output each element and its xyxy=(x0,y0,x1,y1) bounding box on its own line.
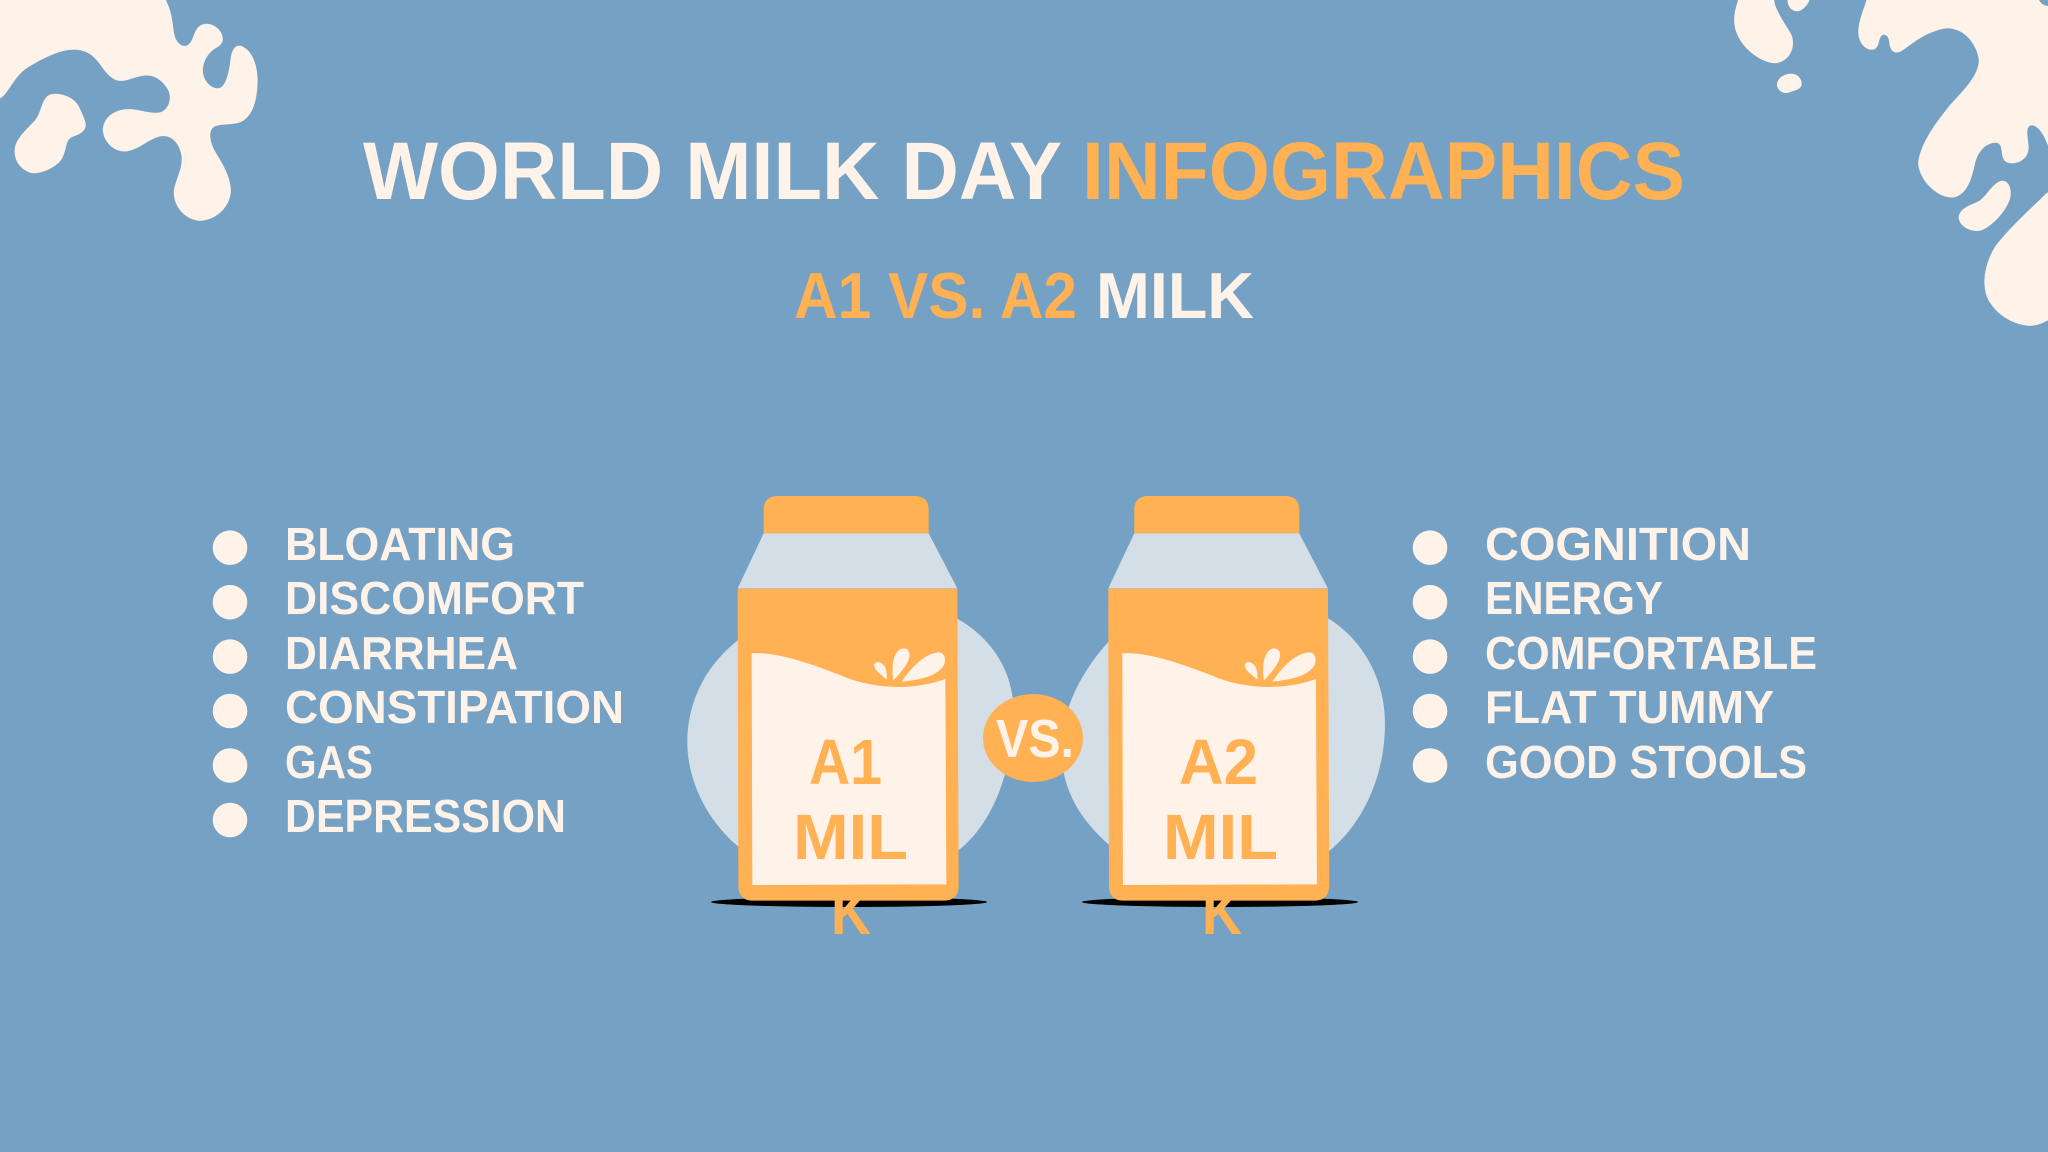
carton label: K xyxy=(831,876,871,948)
carton label: MIL xyxy=(793,801,908,873)
item: good stools: GOOD STOOLS xyxy=(1485,736,1807,788)
milk carton: A1 xyxy=(687,496,1013,948)
item: bloating: BLOATING xyxy=(285,518,515,570)
subtitle: MILK xyxy=(1096,259,1254,332)
carton label xyxy=(1163,726,1278,948)
item: diarrhea: DIARRHEA xyxy=(285,627,518,679)
item: energy xyxy=(1413,572,1663,624)
carton label: A2 xyxy=(1179,726,1258,798)
carton backdrop blob xyxy=(687,602,1013,885)
ground shadow xyxy=(711,897,987,907)
VS badge: VS. xyxy=(996,709,1074,769)
item: gas: GAS xyxy=(285,736,373,788)
title: INFOGRAPHICS xyxy=(1082,126,1685,217)
item: constipation: CONSTIPATION xyxy=(285,681,624,733)
ground shadow xyxy=(1082,897,1358,907)
carton label: A1 xyxy=(809,726,882,798)
carton backdrop blob xyxy=(1062,604,1385,885)
subtitle xyxy=(794,259,1254,332)
carton body xyxy=(738,496,959,901)
subtitle: A1 VS. A2 xyxy=(794,259,1077,332)
item: energy: ENERGY xyxy=(1485,572,1663,624)
item: flat tummy: FLAT TUMMY xyxy=(1485,681,1774,733)
splash notch: top right corner xyxy=(2039,0,2048,6)
VS badge xyxy=(983,694,1083,782)
carton label xyxy=(793,726,908,948)
list: A1 milk effects xyxy=(213,518,624,842)
milk splash: top left xyxy=(0,0,258,221)
carton label: K xyxy=(1202,876,1242,948)
title xyxy=(363,126,1685,217)
milk carton: A2 xyxy=(1062,496,1385,948)
item: cognition: COGNITION xyxy=(1485,518,1751,570)
carton body xyxy=(1108,496,1329,901)
item: gas xyxy=(213,736,373,788)
milk splash: top right xyxy=(1734,0,2048,326)
list: A2 milk benefits xyxy=(1413,518,1817,788)
item: depression: DEPRESSION xyxy=(285,790,566,842)
carton label: MIL xyxy=(1163,801,1278,873)
item: discomfort: DISCOMFORT xyxy=(285,572,584,624)
title: WORLD MILK DAY xyxy=(363,126,1062,217)
item: comfortable: COMFORTABLE xyxy=(1485,627,1817,679)
